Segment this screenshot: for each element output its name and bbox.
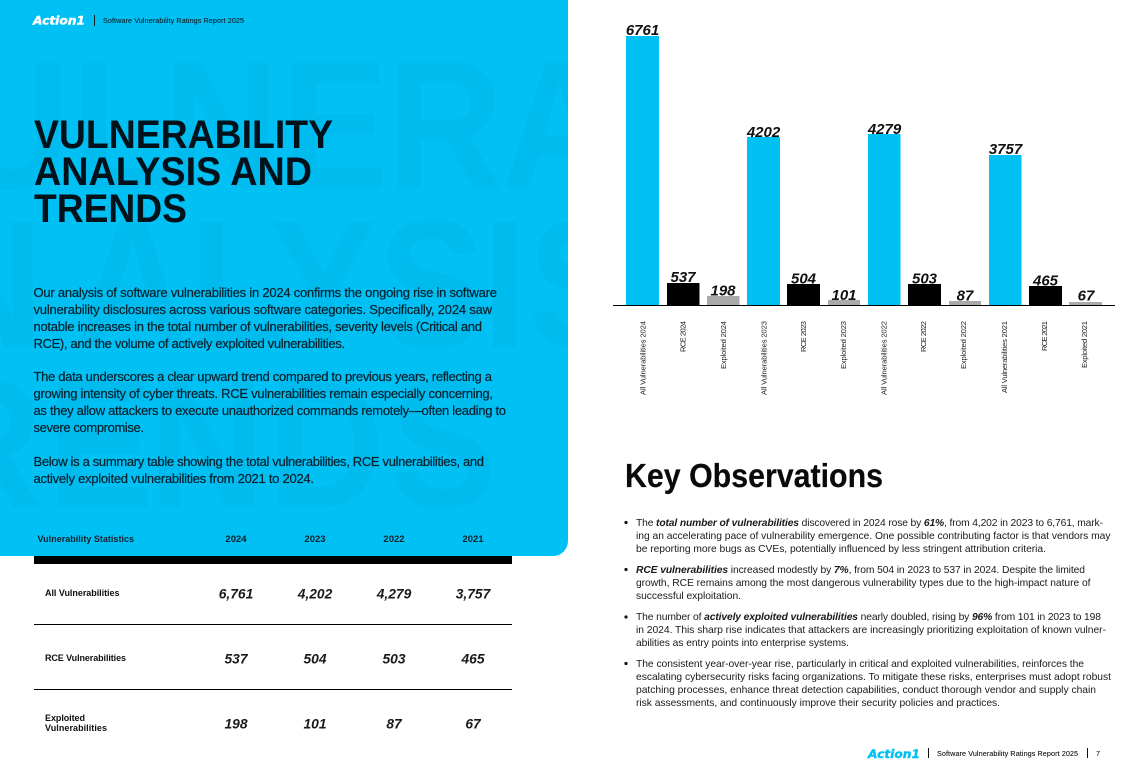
axis labels: All Vulnerabilities 2022: [880, 321, 888, 395]
intro text block: severe compromise.: [34, 420, 144, 435]
title: VULNERABILITY: [34, 113, 333, 157]
bars 2021: 67: [1078, 288, 1095, 304]
table row: exploited vulnerabilities: 198: [224, 716, 248, 732]
axis labels: [638, 321, 1089, 395]
heading: key observations: Key Observations: [625, 457, 883, 494]
bullet 3: in 2024. This sharp rise indicates that attackers are increasingly prioritizing exploitation of known vulner-: [636, 625, 1106, 636]
bullet 4: [624, 659, 1111, 709]
title: ANALYSIS AND: [34, 150, 312, 194]
bullet 1: The total number of vulnerabilities discovered in 2024 rose by 61%, from 4,202 in 2023 to 6,761, mark-: [636, 518, 1103, 529]
bars 2024: 198: [710, 282, 736, 300]
table row: RCE vulnerabilities: RCE Vulnerabilities: [45, 653, 126, 663]
table row: RCE vulnerabilities: [34, 652, 512, 690]
bars 2021: 465: [1032, 272, 1059, 290]
bars 2023: 504: [791, 270, 817, 288]
table header: [34, 534, 512, 564]
table header: Vulnerability Statistics: [38, 534, 134, 544]
axis labels: All Vulnerabilities 2023: [760, 321, 768, 395]
axis labels: Exploited 2023: [839, 321, 848, 369]
statistics table: [34, 534, 512, 733]
bullet 3: abilities as entry points into enterprise systems.: [636, 638, 849, 649]
bars 2022: 4279: [867, 121, 902, 138]
intro text block: [34, 285, 506, 486]
table row: RCE vulnerabilities: 504: [303, 652, 327, 666]
axis labels: RCE 2022: [919, 321, 928, 352]
table header: 2021: [462, 534, 484, 545]
bars 2022: 503: [912, 270, 938, 288]
observations list: [624, 518, 1111, 709]
axis labels: All Vulnerabilities 2024: [638, 321, 648, 395]
table row: exploited vulnerabilities: [45, 713, 482, 733]
intro text block: The data underscores a clear upward trend compared to previous years, reflecting a: [34, 369, 493, 384]
axis labels: Exploited 2021: [1080, 321, 1089, 368]
intro text block: vulnerability disclosures across various software categories. Specifically, 2024 saw: [34, 302, 493, 317]
bullet 1: be reporting more bugs as CVEs, potentially influenced by less stringent attribution criteria.: [636, 544, 1046, 555]
bars 2023: 101: [831, 287, 857, 304]
bullet 4: The consistent year-over-year rise, particularly in critical and exploited vulnerabilities, reinforces the: [636, 659, 1084, 670]
intro text block: growing intensity of cyber threats. RCE vulnerabilities remain especially concerning,: [34, 386, 493, 401]
bars 2021: [989, 141, 1102, 305]
footer logo: Action1: [867, 747, 920, 761]
bars 2024: [626, 22, 740, 305]
bullet 2: successful exploitation.: [636, 591, 741, 602]
table row: all vulnerabilities: 4,202: [297, 586, 333, 602]
intro text block: Our analysis of software vulnerabilities in 2024 confirms the ongoing rise in software: [34, 285, 497, 300]
bullet 2: [624, 565, 1091, 602]
header logo: Action1: [32, 14, 85, 28]
bars 2021: 3757: [989, 141, 1023, 158]
table row: exploited vulnerabilities: 101: [303, 716, 327, 732]
bars 2024: 537: [670, 269, 696, 286]
title: TRENDS: [34, 187, 187, 231]
intro text block: Below is a summary table showing the total vulnerabilities, RCE vulnerabilities, and: [34, 454, 484, 469]
bullet 1: ing an accelerating pace of vulnerability emergence. One possible contributing factor is that vendors may: [636, 531, 1111, 542]
bullet 1: [624, 518, 1111, 555]
table row: all vulnerabilities: [34, 586, 512, 625]
intro text block: actively exploited vulnerabilities from 2021 to 2024.: [34, 471, 314, 486]
axis labels: Exploited 2024: [719, 321, 728, 369]
bullet 4: patching processes, enhance threat detection capabilities, conduct thorough vendor and supply chain: [636, 685, 1096, 696]
intro text block: as they allow attackers to execute unauthorized commands remotely—often leading to: [34, 403, 506, 418]
intro text block: notable increases in the total number of vulnerabilities, severity levels (Critical and: [34, 319, 482, 334]
table row: exploited vulnerabilities: Exploited: [45, 713, 85, 723]
bullet 2: growth, RCE remains among the most dangerous vulnerability types due to the high-impact nature of: [636, 578, 1091, 589]
axis labels: RCE 2024: [678, 321, 688, 352]
table row: all vulnerabilities: 6,761: [219, 586, 253, 602]
table row: exploited vulnerabilities: Vulnerabilities: [45, 723, 107, 733]
panel: blue header background: [0, 0, 568, 556]
header report title: Software Vulnerability Ratings Report 2025: [103, 16, 244, 25]
bullet 3: The number of actively exploited vulnerabilities nearly doubled, rising by 96% from 101 in 2023 to 198: [636, 612, 1101, 623]
table header: 2024: [225, 534, 247, 545]
bar chart: [613, 22, 1115, 395]
table row: RCE vulnerabilities: 537: [224, 652, 249, 666]
bars 2022: 87: [957, 288, 974, 304]
bullet 4: escalating cybersecurity risks facing organizations. To mitigate these risks, enterprises must adopt robust: [636, 672, 1111, 683]
table row: exploited vulnerabilities: 67: [465, 716, 482, 732]
axis labels: RCE 2023: [799, 321, 808, 352]
intro text block: RCE), and the volume of actively exploited vulnerabilities.: [34, 336, 345, 351]
footer report title and page number: Software Vulnerability Ratings Report 2025: [937, 749, 1078, 758]
bars 2023: [746, 124, 860, 305]
bars 2024: 6761: [626, 22, 659, 39]
footer report title and page number: 7: [1096, 749, 1100, 758]
bullet 2: RCE vulnerabilities increased modestly by 7%, from 504 in 2023 to 537 in 2024. Despite the limited: [636, 565, 1085, 576]
table row: all vulnerabilities: All Vulnerabilities: [45, 588, 120, 598]
title: [34, 113, 333, 231]
bullet 3: [624, 612, 1106, 649]
table row: exploited vulnerabilities: 87: [386, 716, 403, 732]
table row: all vulnerabilities: 4,279: [376, 586, 412, 602]
axis labels: All Vulnerabilities 2021: [1000, 321, 1009, 393]
table row: all vulnerabilities: 3,757: [456, 586, 492, 602]
table header: 2022: [383, 534, 405, 545]
table header: 2023: [304, 534, 326, 545]
table row: RCE vulnerabilities: 465: [460, 652, 485, 666]
bullet 4: risk assessments, and continuously improve their security policies and practices.: [636, 698, 1000, 709]
axis labels: RCE 2021: [1040, 321, 1049, 351]
table row: RCE vulnerabilities: 503: [382, 652, 406, 666]
bars 2023: 4202: [746, 124, 781, 141]
axis labels: Exploited 2022: [959, 321, 968, 369]
bars 2022: [867, 121, 981, 305]
